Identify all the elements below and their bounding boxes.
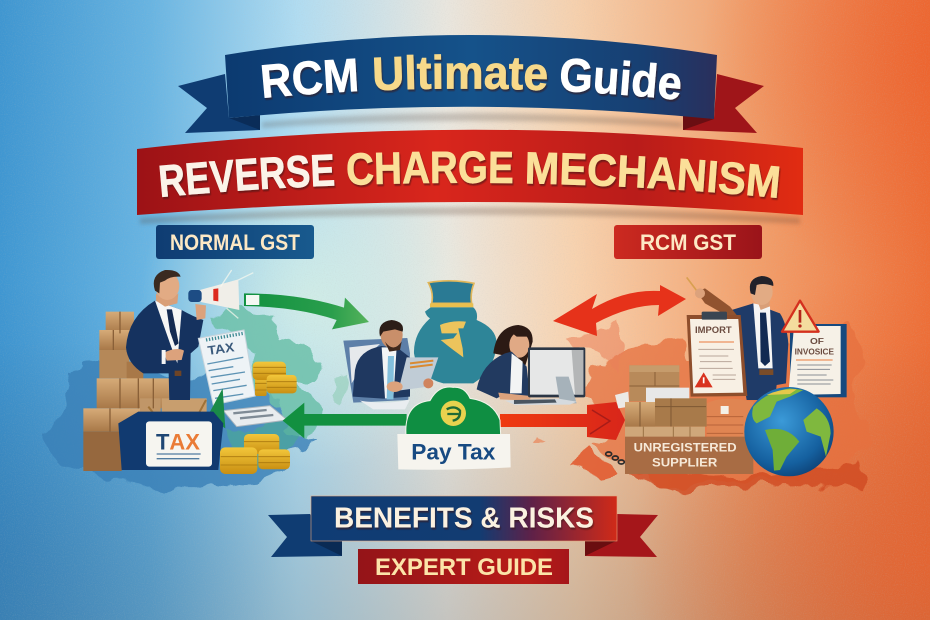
title text: Guide — [560, 58, 682, 102]
main title text: CHARGE — [347, 151, 514, 188]
left scene: normal gst — [83, 270, 297, 474]
bottom blue and red ribbon — [268, 496, 658, 557]
blue ribbon right tail — [683, 74, 764, 133]
blue ribbon banner — [178, 35, 764, 133]
ribbon left tail — [268, 514, 342, 557]
icon: invoice document: INVOSICE — [795, 347, 835, 356]
icon: gold coins lower — [220, 434, 290, 474]
icon: globe — [744, 387, 834, 476]
figure: man pointing — [687, 276, 788, 400]
blue ribbon left tail — [178, 74, 260, 133]
supplier label: SUPPLIER — [652, 456, 717, 470]
pay tax label: Pay Tax — [411, 440, 496, 465]
figure: woman at computer — [477, 325, 533, 401]
arrow: green curved to centre — [244, 293, 369, 329]
ribbon heading: BENEFITS & RISKS — [334, 502, 594, 534]
icon: pay tax cloud and label — [397, 387, 511, 470]
figure: man with document — [343, 320, 438, 409]
main title text — [159, 151, 781, 200]
ribbon body — [311, 496, 617, 541]
blue ribbon body — [225, 35, 717, 119]
icon: warning triangle — [782, 301, 819, 332]
icon: import clipboard: IMPORT — [695, 325, 732, 335]
arrow: green left from pay tax — [283, 403, 407, 438]
red ribbon banner — [137, 130, 803, 226]
icon: tax notepad — [198, 330, 255, 405]
centre scene: paying tax — [343, 281, 585, 409]
right scene: rcm gst — [606, 276, 847, 476]
icon: computer monitor — [505, 347, 585, 405]
red ribbon body — [137, 130, 803, 215]
icon: paper stack — [223, 406, 287, 427]
expert guide tag — [358, 549, 569, 584]
icon: chain link — [606, 452, 624, 464]
icon: megaphone — [188, 270, 253, 318]
icon: tax notepad: TAX — [207, 340, 236, 358]
icon: tax box: TAX — [156, 429, 200, 454]
main title text: MECHANISM — [526, 152, 781, 200]
icon: stacked boxes — [83, 312, 207, 471]
icon: money bag — [414, 281, 497, 383]
icon: gold coins upper — [253, 362, 297, 396]
supplier label: UNREGISTERED — [634, 440, 737, 454]
icon: tax box — [118, 388, 225, 470]
title text: RCM — [262, 58, 358, 100]
icon: import clipboard — [687, 312, 747, 397]
figure: man with megaphone — [126, 270, 206, 400]
painted splashes behind scenes — [47, 308, 873, 490]
ribbon right tail — [585, 514, 658, 557]
icon: green cloud with coin — [406, 387, 501, 435]
badge: normal gst: NORMAL GST — [170, 230, 300, 255]
icon: crates and boxes — [615, 365, 753, 474]
main title text: REVERSE — [159, 154, 336, 200]
badge: rcm gst — [614, 225, 762, 259]
expert guide tag: EXPERT GUIDE — [375, 554, 553, 581]
icon: invoice document: OF — [810, 337, 824, 346]
badge: rcm gst: RCM GST — [640, 230, 737, 255]
badge: normal gst — [156, 225, 314, 259]
icon: invoice document — [788, 324, 847, 397]
title text: Ultimate — [374, 54, 548, 94]
arrow: red straight right — [500, 402, 625, 440]
arrow: red curved double headed — [553, 285, 686, 336]
title text — [262, 54, 682, 102]
